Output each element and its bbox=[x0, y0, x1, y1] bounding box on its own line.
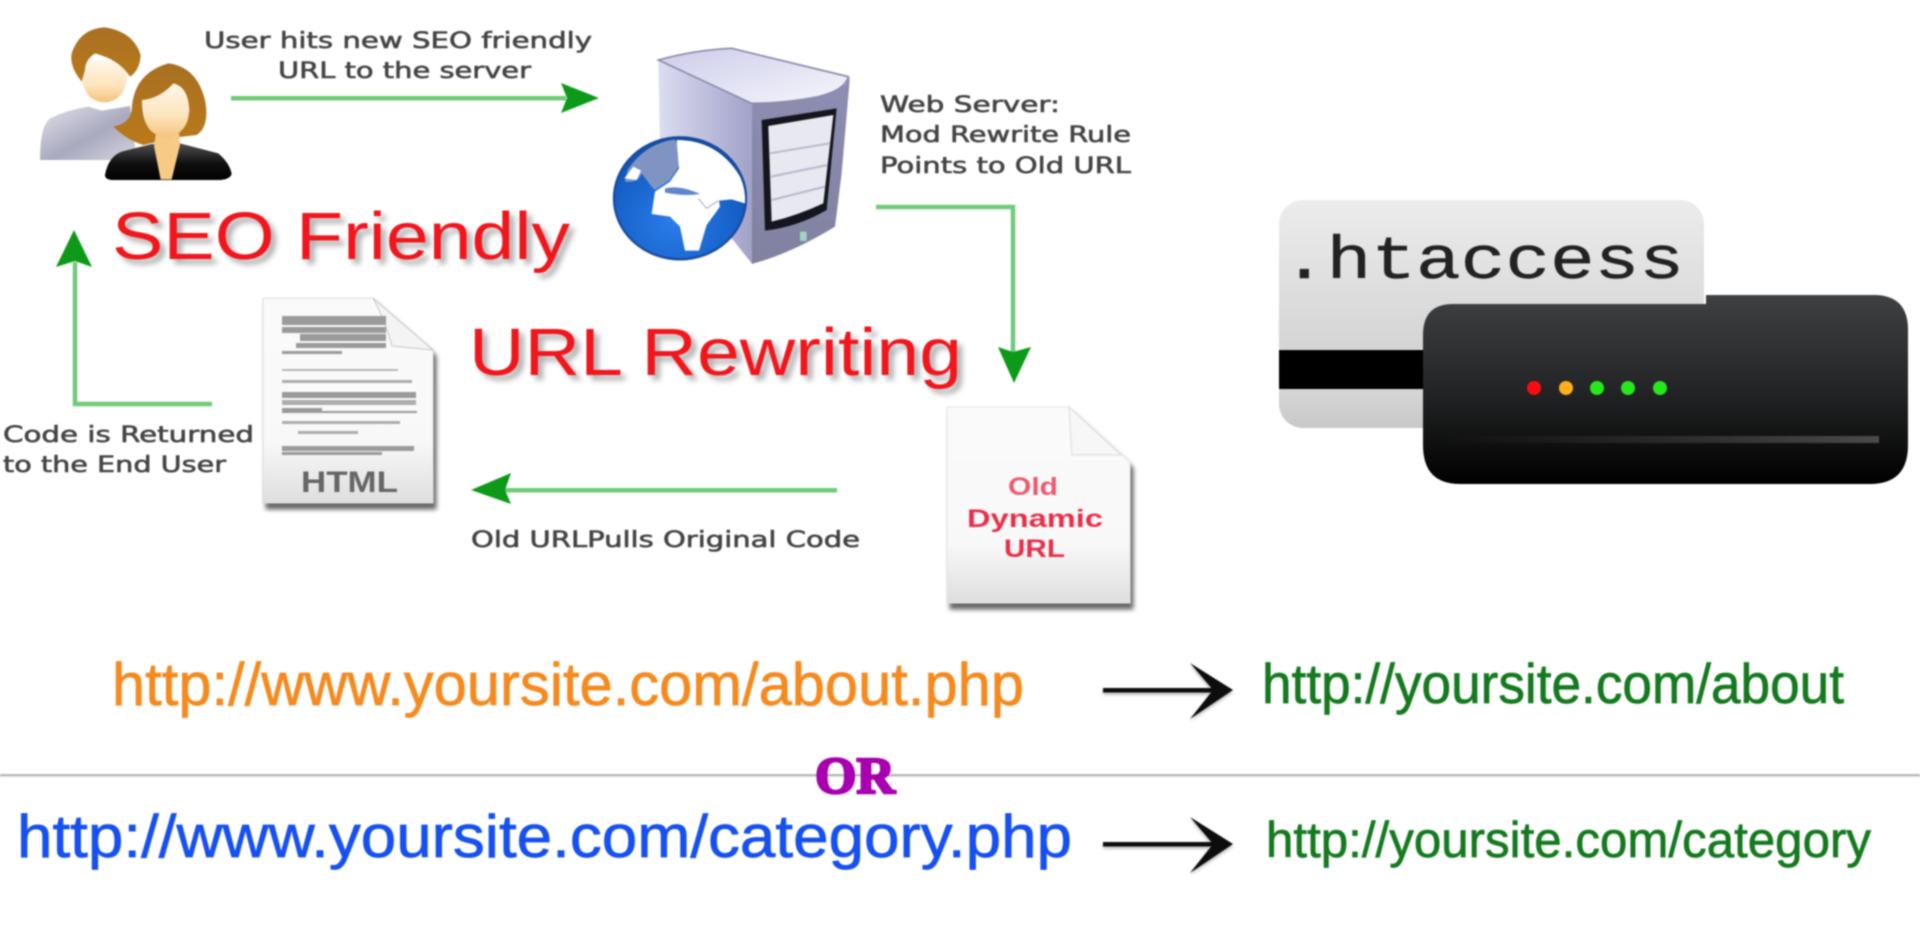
heading: SEO Friendly: SEO Friendly bbox=[112, 199, 571, 274]
label: OR: OR bbox=[815, 748, 896, 805]
url: clean category: http://yoursite.com/category bbox=[1266, 812, 1871, 868]
label: user hits server: User hits new SEO friendly bbox=[204, 29, 592, 54]
label: old URL pulls original code: Old URLPulls Original Code bbox=[471, 528, 860, 553]
arrow: code returned to user bbox=[56, 230, 212, 404]
url: clean about: http://yoursite.com/about bbox=[1262, 652, 1844, 715]
icon: two users bbox=[40, 27, 232, 180]
arrow: old URL to HTML bbox=[471, 473, 837, 504]
icon: .htaccess card and reader bbox=[1279, 200, 1908, 484]
label: web server: Web Server: bbox=[880, 93, 1060, 118]
icon: web server with globe bbox=[614, 48, 850, 264]
document text: URL bbox=[1004, 535, 1065, 563]
arrow: category rewrite bbox=[1103, 817, 1233, 873]
arrow: about rewrite bbox=[1103, 663, 1233, 719]
document text: Old bbox=[1008, 473, 1058, 501]
icon: HTML document bbox=[263, 298, 433, 503]
document text bbox=[967, 473, 1103, 563]
HTML label: HTML bbox=[301, 466, 398, 499]
label: web server: Points to Old URL bbox=[880, 154, 1132, 179]
url: about.php: http://www.yoursite.com/about.php bbox=[112, 651, 1024, 718]
url: category.php: http://www.yoursite.com/category.php bbox=[17, 803, 1072, 870]
label: code returned: Code is Returned bbox=[3, 423, 254, 448]
reader device bbox=[1423, 295, 1908, 484]
label: user hits server: URL to the server bbox=[278, 59, 532, 84]
card bbox=[1279, 200, 1704, 428]
label: web server bbox=[880, 93, 1132, 179]
label: code returned bbox=[3, 423, 254, 478]
globe bbox=[614, 137, 746, 259]
label: code returned: to the End User bbox=[3, 453, 227, 478]
arrow: server to old URL bbox=[876, 207, 1031, 383]
card: .htaccess bbox=[1282, 229, 1684, 297]
label: web server: Mod Rewrite Rule bbox=[880, 123, 1131, 148]
document text: Dynamic bbox=[967, 505, 1103, 533]
label: user hits server bbox=[204, 29, 592, 84]
heading: URL Rewriting: URL Rewriting bbox=[469, 315, 962, 390]
arrow: user to server bbox=[231, 83, 599, 113]
divider bbox=[0, 774, 1920, 776]
icon: old dynamic URL document bbox=[947, 407, 1130, 603]
